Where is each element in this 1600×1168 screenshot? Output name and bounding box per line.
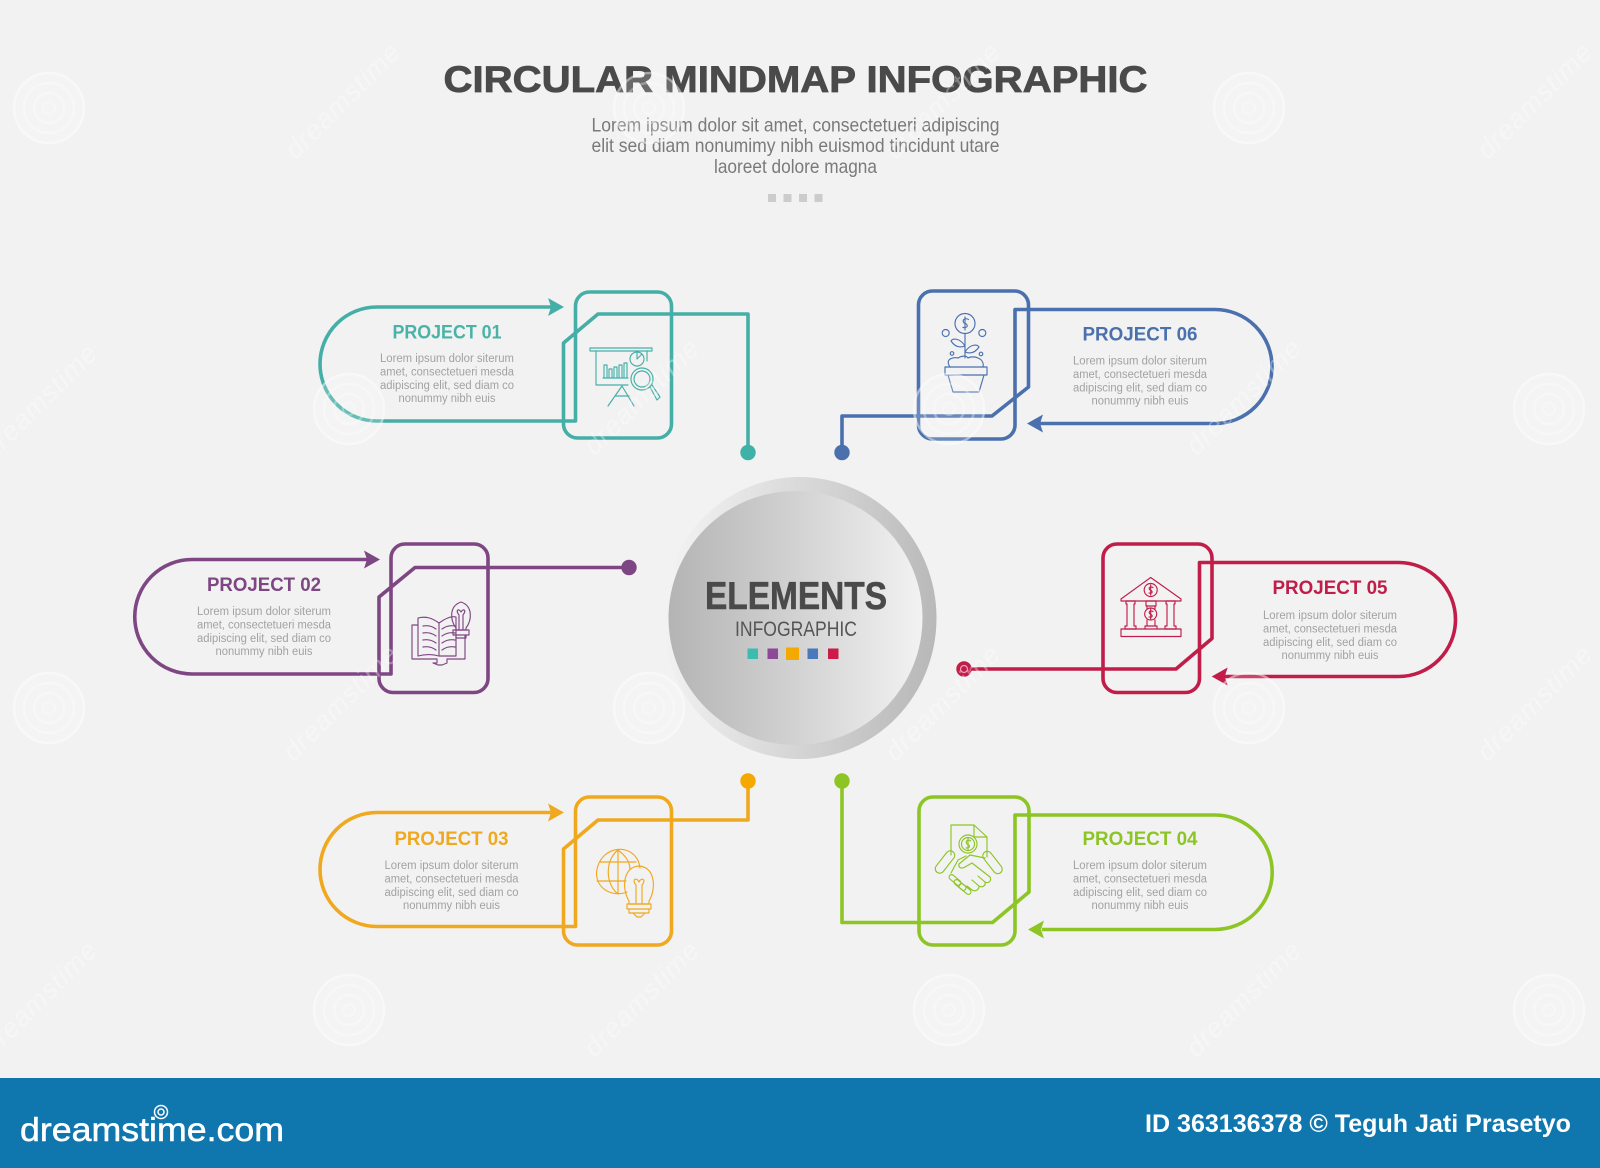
node dot bbox=[740, 773, 756, 789]
center circle bbox=[662, 477, 936, 759]
outline and connector bbox=[964, 544, 1456, 692]
heading: PROJECT 01 bbox=[392, 322, 502, 344]
center subheading: INFOGRAPHIC bbox=[735, 618, 857, 641]
outline and connector bbox=[842, 781, 1272, 945]
body text: Lorem ipsum dolor siterum bbox=[1073, 860, 1207, 872]
body text: adipiscing elit, sed diam co bbox=[384, 887, 518, 899]
subtitle text block: Lorem ipsum dolor sit amet, consectetueri adipiscing bbox=[592, 114, 1000, 136]
panel: project 04 bbox=[834, 773, 1272, 945]
body text: amet, consectetueri mesda bbox=[384, 874, 519, 886]
body text: Lorem ipsum dolor siterum bbox=[1263, 610, 1397, 622]
body text: amet, consectetueri mesda bbox=[1073, 369, 1208, 381]
colour squares bbox=[748, 648, 838, 660]
node dot bbox=[740, 445, 756, 460]
icon: book and bulb bbox=[412, 602, 470, 665]
icon: bank bbox=[1121, 578, 1181, 636]
text: dreamstime bbox=[1180, 935, 1308, 1063]
icon: globe and bulb bbox=[596, 849, 653, 917]
heading: PROJECT 03 bbox=[394, 828, 509, 850]
heading: PROJECT 05 bbox=[1272, 577, 1388, 599]
body text bbox=[1073, 356, 1208, 408]
arrow bbox=[1027, 414, 1043, 432]
title: CIRCULAR MINDMAP INFOGRAPHIC bbox=[444, 59, 1148, 100]
body text bbox=[380, 353, 515, 405]
body text bbox=[1073, 860, 1208, 912]
body text: Lorem ipsum dolor siterum bbox=[197, 606, 331, 618]
outer ring bbox=[662, 477, 936, 759]
body text: adipiscing elit, sed diam co bbox=[197, 633, 331, 645]
heading: PROJECT 02 bbox=[207, 574, 321, 596]
icon: presentation board bbox=[590, 348, 660, 406]
title dots bbox=[768, 194, 822, 202]
footer credit: ID 363136378 © Teguh Jati Prasetyo bbox=[1145, 1110, 1571, 1138]
text: dreamstime bbox=[1471, 639, 1599, 767]
heading: PROJECT 04 bbox=[1082, 828, 1198, 850]
body text bbox=[197, 606, 332, 658]
arrow bbox=[548, 298, 564, 316]
footer logo spiral bbox=[154, 1106, 168, 1118]
text: dreamstime bbox=[277, 639, 405, 767]
body text: nonummy nibh euis bbox=[1282, 650, 1379, 662]
body text: Lorem ipsum dolor siterum bbox=[384, 860, 518, 872]
body text: nonummy nibh euis bbox=[403, 900, 500, 912]
text: dreamstime bbox=[1471, 37, 1599, 165]
arrow bbox=[364, 550, 380, 568]
outline and connector bbox=[842, 291, 1272, 452]
footer logo text: dreamstime.com bbox=[20, 1111, 284, 1148]
body text: amet, consectetueri mesda bbox=[380, 366, 515, 378]
outline and connector bbox=[320, 781, 748, 945]
body text: nonummy nibh euis bbox=[216, 646, 313, 658]
inner disk bbox=[668, 491, 922, 745]
subtitle text block: laoreet dolore magna bbox=[714, 156, 877, 178]
body text: amet, consectetueri mesda bbox=[197, 620, 332, 632]
text: dreamstime bbox=[279, 37, 407, 165]
heading: PROJECT 06 bbox=[1082, 324, 1198, 346]
arrow bbox=[1212, 668, 1228, 686]
body text: adipiscing elit, sed diam co bbox=[1073, 382, 1207, 394]
arrow bbox=[1028, 920, 1044, 938]
text: dreamstime bbox=[879, 639, 1007, 767]
panel: project 06 bbox=[834, 291, 1272, 460]
body text: adipiscing elit, sed diam co bbox=[1073, 887, 1207, 899]
icon: money plant bbox=[942, 314, 987, 392]
text: dreamstime bbox=[879, 37, 1007, 165]
panel: project 05 bbox=[956, 544, 1456, 692]
body text: nonummy nibh euis bbox=[1092, 900, 1189, 912]
node dot bbox=[834, 445, 850, 460]
body text: Lorem ipsum dolor siterum bbox=[380, 353, 514, 365]
subtitle text block: elit sed diam nonumimy nibh euismod tincidunt utare bbox=[592, 135, 1000, 157]
text: dreamstime bbox=[578, 935, 706, 1063]
body text bbox=[1263, 610, 1398, 662]
body text: nonummy nibh euis bbox=[398, 393, 496, 405]
panel: project 03 bbox=[320, 773, 756, 945]
body text: adipiscing elit, sed diam co bbox=[1263, 637, 1397, 649]
body text: amet, consectetueri mesda bbox=[1263, 624, 1398, 636]
panel: project 01 bbox=[320, 292, 756, 460]
body text: amet, consectetueri mesda bbox=[1073, 874, 1208, 886]
node dot bbox=[621, 560, 637, 575]
body text: nonummy nibh euis bbox=[1092, 396, 1189, 408]
node dot bbox=[834, 773, 850, 789]
outline and connector bbox=[320, 292, 748, 452]
arrow bbox=[548, 804, 564, 822]
footer bar bbox=[0, 1078, 1600, 1168]
text: dreamstime bbox=[1180, 333, 1308, 461]
subtitle text block bbox=[592, 114, 1000, 178]
icon: contract handshake bbox=[933, 825, 1004, 895]
body text bbox=[384, 860, 519, 912]
outline and connector bbox=[135, 544, 629, 692]
center heading: ELEMENTS bbox=[705, 575, 887, 618]
body text: adipiscing elit, sed diam co bbox=[380, 380, 514, 392]
text: dreamstime bbox=[578, 333, 706, 461]
panel: project 02 bbox=[135, 544, 637, 692]
node dot bbox=[956, 661, 972, 677]
body text: Lorem ipsum dolor siterum bbox=[1073, 356, 1207, 368]
